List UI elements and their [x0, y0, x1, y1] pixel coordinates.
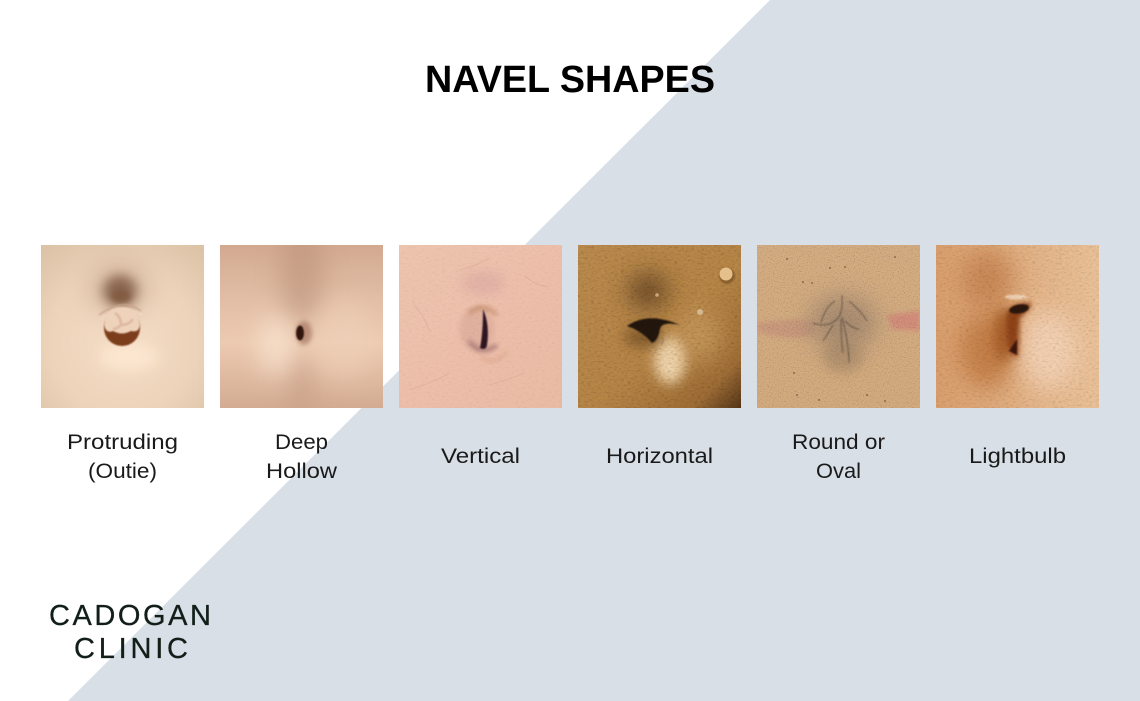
- photo: protruding navel: [41, 245, 204, 408]
- logo: Cadogan Clinic: [49, 600, 211, 665]
- label: round or oval: Oval: [816, 460, 861, 483]
- label: deep hollow: Deep: [275, 431, 328, 454]
- label: protruding: (Outie): [88, 460, 157, 483]
- label: round or oval: Round or: [792, 431, 885, 454]
- photo: deep hollow navel: [220, 245, 383, 408]
- label: round or oval: [792, 431, 885, 483]
- label: deep hollow: Hollow: [266, 460, 338, 483]
- title: NAVEL SHAPES: [425, 59, 715, 101]
- label: lightbulb: Lightbulb: [969, 445, 1066, 468]
- photo: horizontal navel: [578, 245, 741, 408]
- logo: Cadogan Clinic: CLINIC: [74, 633, 188, 665]
- label: vertical: Vertical: [441, 445, 520, 468]
- label: horizontal: Horizontal: [606, 445, 713, 468]
- label: deep hollow: [266, 431, 338, 483]
- label: protruding: [67, 431, 178, 483]
- photo: lightbulb navel: [936, 245, 1099, 408]
- label: protruding: Protruding: [67, 431, 178, 454]
- photo: round or oval navel: [757, 245, 920, 408]
- logo: Cadogan Clinic: CADOGAN: [49, 600, 211, 632]
- photo: vertical navel: [399, 245, 562, 408]
